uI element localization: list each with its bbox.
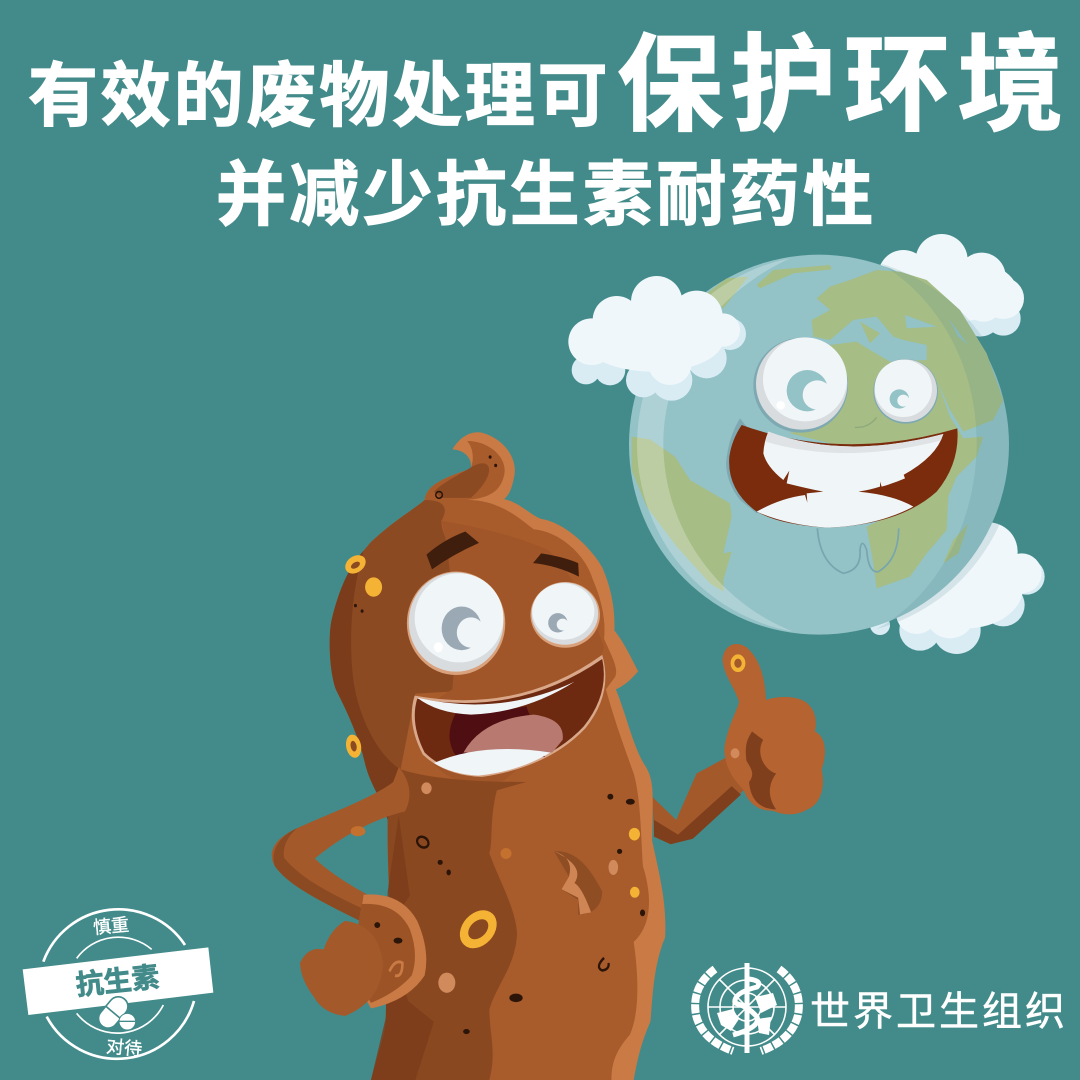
badge: handle antibiotics with care [23,909,213,1060]
body outline [330,432,665,1080]
greenland [757,265,832,288]
snake [733,979,759,1035]
curl shade [434,463,489,498]
subtitle: 并减少抗生素耐药性 [216,156,877,234]
right eye [873,359,938,424]
specks and cereal rings [343,455,645,1034]
tongue [463,715,563,752]
left eye [407,572,505,675]
africa lower [867,430,983,588]
badge band label: 抗生素 [74,961,161,1001]
head shadow [330,500,489,820]
wreath [695,969,799,1051]
swirl crease [554,851,602,915]
cloud: bottom right [870,522,1045,654]
far left dark strip [330,550,401,820]
globe [629,255,1017,635]
throat [450,706,545,761]
left rim [637,258,793,632]
nose [855,417,877,427]
badge rings [43,909,194,1059]
eyebrow left [426,532,479,569]
north america [707,277,748,308]
cloud: top right [878,234,1024,337]
left fist [300,894,426,1016]
face mid tone [419,521,604,786]
WHO emblem [695,963,799,1053]
staff [744,963,750,1053]
title line one small: 有效的废物处理可 [28,57,610,135]
torso shadow [371,769,526,1080]
south america [632,437,732,592]
top teeth [417,682,574,715]
africa upper [790,342,958,447]
left arm [272,767,409,921]
poop character [272,432,825,1080]
badge bottom label: 对待 [105,1036,143,1060]
icon: pills [95,993,136,1032]
teeth [757,432,943,528]
mouth [412,655,605,777]
title [28,27,1071,234]
eyebrow right [533,553,579,577]
badge band [23,947,213,1015]
cloud: left [568,276,746,401]
right arm and thumbs up [652,644,825,844]
body main tone [330,441,649,1080]
bottom teeth [434,749,550,776]
left eye [753,337,848,433]
globe grid [708,968,786,1046]
thumb [722,644,825,814]
eurasia [812,270,1003,432]
organisation name: 世界卫生组织 [810,990,1068,1034]
right eye [530,582,600,648]
map blobs [717,993,777,1035]
title emphasis: 保护环境 [617,27,1071,145]
continents [632,265,1003,592]
right rim [877,263,1017,629]
chin swirl [817,528,899,573]
earth character with clouds [568,234,1045,654]
mouth [726,418,958,528]
madagascar [943,523,968,563]
badge top label: 慎重 [92,915,130,938]
seas [860,315,968,345]
